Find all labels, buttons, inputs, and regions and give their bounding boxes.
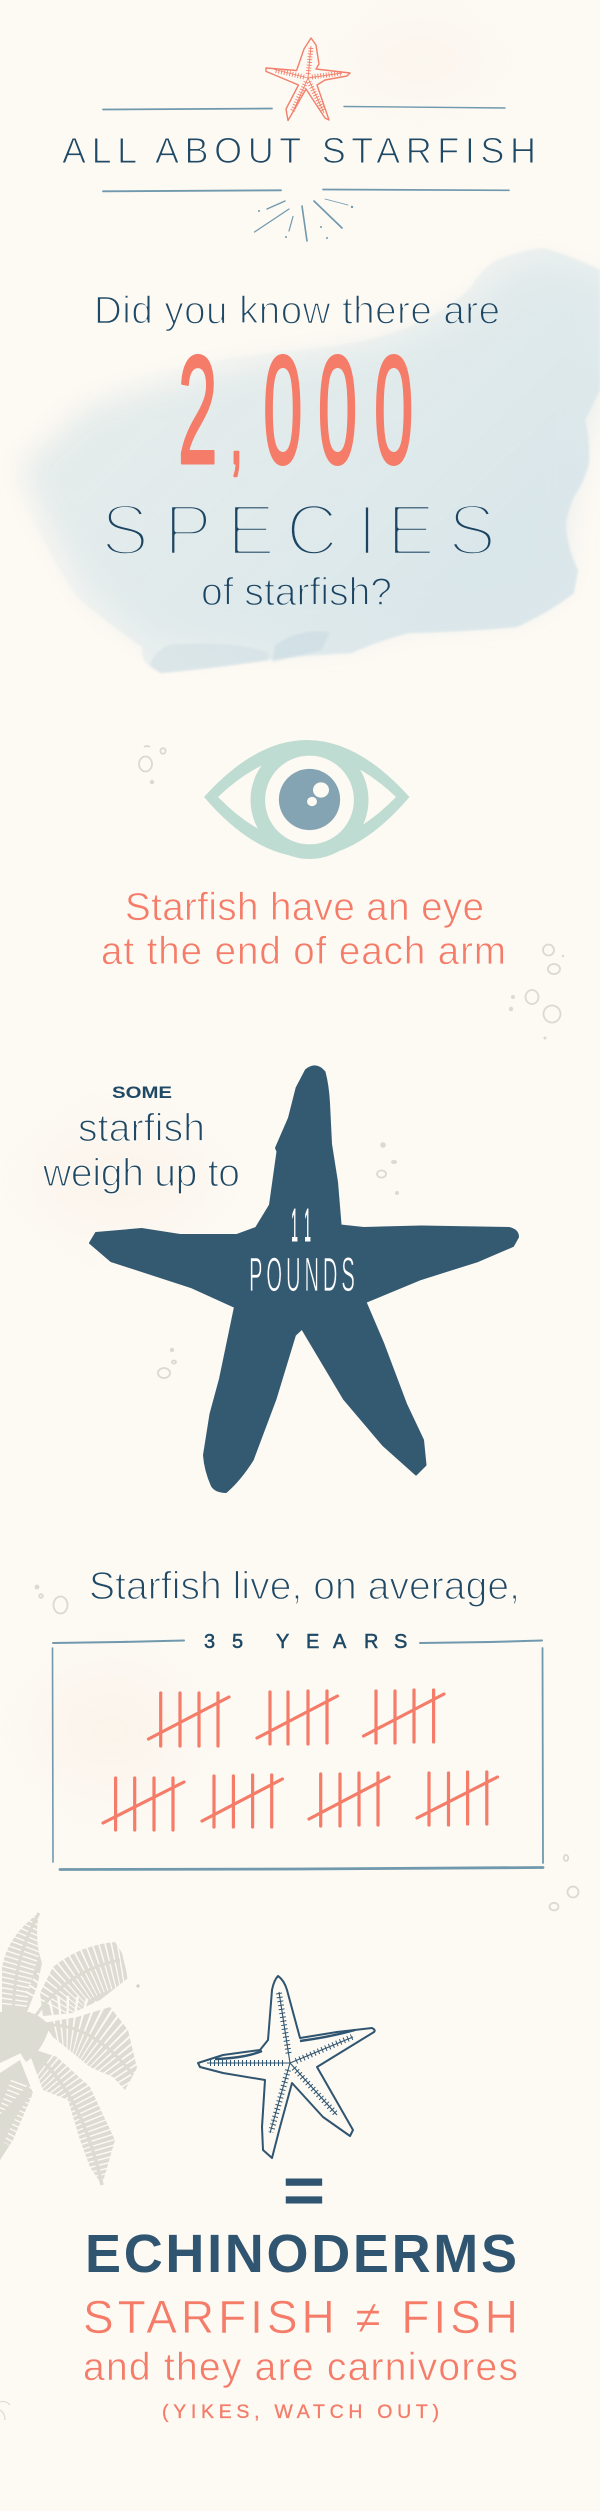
symbol: equals: = xyxy=(283,2153,325,2227)
title: ALL ABOUT STARFISH xyxy=(62,130,536,171)
illustration: tiny palm fragment xyxy=(0,2401,10,2420)
bubbles: lower right xyxy=(550,1855,578,1910)
watercolor wash xyxy=(8,248,600,673)
bubbles: upper xyxy=(139,746,564,1040)
text: species: SPECIES xyxy=(101,491,496,571)
text: echinoderms: ECHINODERMS xyxy=(85,2224,517,2284)
text: carnivores: and they are carnivores xyxy=(83,2346,518,2389)
text: eye fact: at the end of each arm xyxy=(101,930,506,973)
heading: lower rules xyxy=(103,190,509,191)
text: starfish live on average: Starfish live, on average, xyxy=(89,1565,520,1608)
text: starfish not fish: STARFISH ≠ FISH xyxy=(83,2291,518,2343)
illustration: palm tree xyxy=(0,1913,140,2188)
heading: coral starfish icon xyxy=(266,38,350,120)
text: did you know: Did you know there are xyxy=(94,290,500,332)
bubbles: beside star xyxy=(158,1142,399,1378)
heading: burst marks xyxy=(254,199,353,241)
heading: top rules xyxy=(103,106,505,110)
text: some starfish weigh up to xyxy=(42,1083,240,1195)
tally marks: top row xyxy=(148,1690,444,1746)
text: some starfish weigh up to: starfish xyxy=(78,1107,205,1150)
text: some starfish weigh up to: SOME xyxy=(112,1083,172,1102)
text: 11 pounds: POUNDS xyxy=(249,1248,355,1301)
number: 2,000: 2 xyxy=(178,324,217,496)
icon: eye xyxy=(204,740,410,857)
icon: navy line-drawn starfish xyxy=(198,1976,375,2158)
tally marks: bottom row xyxy=(103,1772,498,1830)
text: yikes: (YIKES, WATCH OUT) xyxy=(162,2401,439,2423)
text: eye fact: Starfish have an eye xyxy=(125,886,484,929)
frame: lifespan box xyxy=(52,1640,543,1870)
text: some starfish weigh up to: weigh up to xyxy=(42,1152,240,1195)
number: 2,000: , xyxy=(230,374,243,485)
text: 11 pounds: 11 xyxy=(291,1201,311,1252)
text: of starfish: of starfish? xyxy=(201,571,392,614)
number: 2,000: 000 xyxy=(263,324,413,496)
bubbles: left of lifespan xyxy=(35,1585,68,1614)
text: eye fact xyxy=(101,886,506,973)
text: 35 years: 35 YEARS xyxy=(204,1631,407,1653)
text: 11 pounds xyxy=(249,1201,355,1301)
icon: big navy starfish xyxy=(90,1066,518,1492)
